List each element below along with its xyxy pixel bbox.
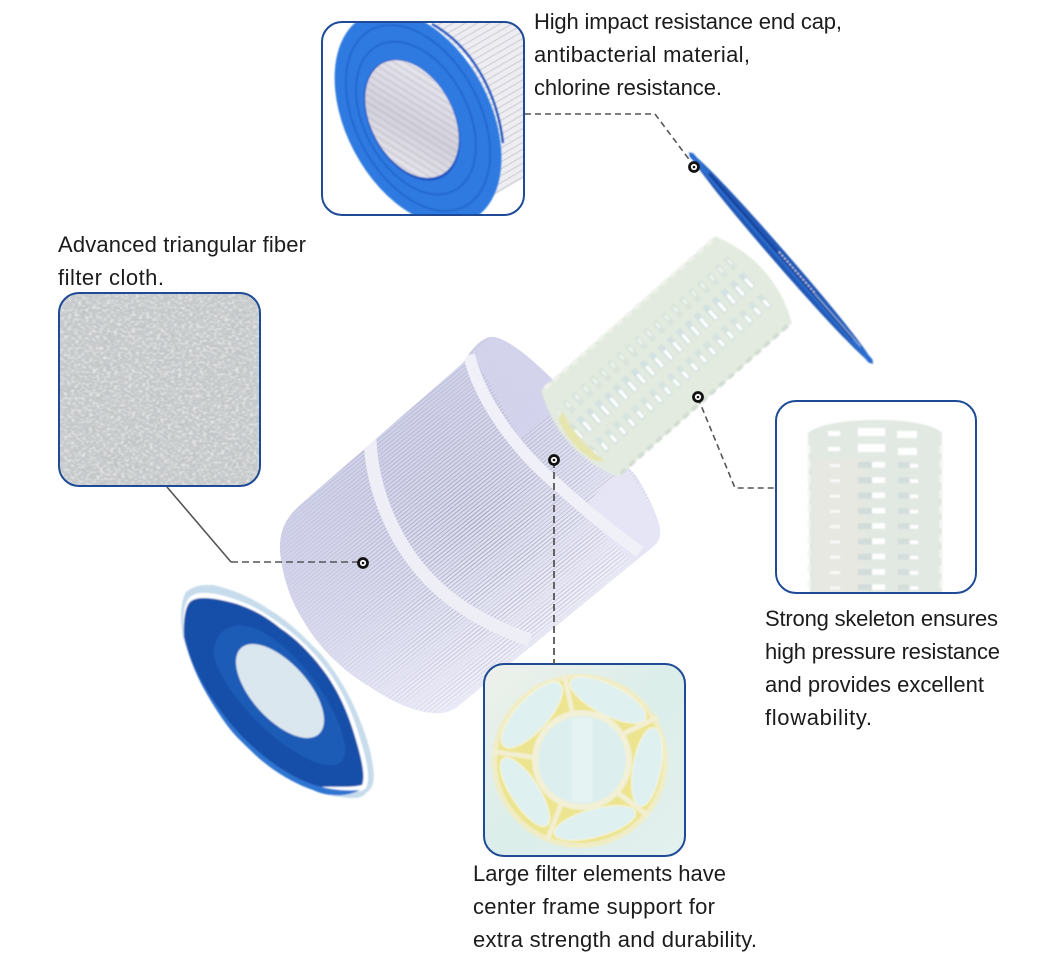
text: center frame description: Large filter elements have — [473, 861, 726, 886]
text: end cap description: High impact resistance end cap, — [534, 9, 842, 34]
callout: filter cloth photo panel — [59, 293, 260, 486]
text: center frame description — [473, 861, 757, 952]
text: center frame description: extra strength and durability. — [473, 927, 757, 952]
text: filter cloth description: filter cloth. — [58, 265, 164, 290]
filter cylinder — [280, 336, 660, 714]
text: end cap description: antibacterial material, — [534, 42, 750, 67]
connector: filter cloth leader — [167, 487, 368, 568]
text: end cap description — [534, 9, 842, 100]
top end cap, edge view — [684, 148, 878, 368]
text: center frame description: center frame support for — [473, 894, 715, 919]
text: filter cloth description — [58, 232, 306, 290]
bottom end cap — [181, 585, 374, 798]
text: skeleton description — [765, 606, 1000, 730]
callout: center frame photo panel — [484, 664, 685, 856]
connector: skeleton leader — [694, 392, 775, 488]
illustration: exploded filter cartridge — [181, 148, 878, 798]
text: filter cloth description: Advanced triangular fiber — [58, 232, 306, 257]
text: end cap description: chlorine resistance. — [534, 75, 722, 100]
skeleton tube — [531, 227, 802, 486]
text: skeleton description: and provides excellent — [765, 672, 984, 697]
callout: end cap photo panel — [321, 21, 525, 216]
text: skeleton description: Strong skeleton ensures — [765, 606, 998, 631]
callout: skeleton photo panel — [776, 401, 976, 593]
text: skeleton description: high pressure resistance — [765, 639, 1000, 664]
connector: center frame leader — [550, 456, 558, 664]
connector: end cap leader — [525, 114, 698, 172]
text: skeleton description: flowability. — [765, 705, 872, 730]
